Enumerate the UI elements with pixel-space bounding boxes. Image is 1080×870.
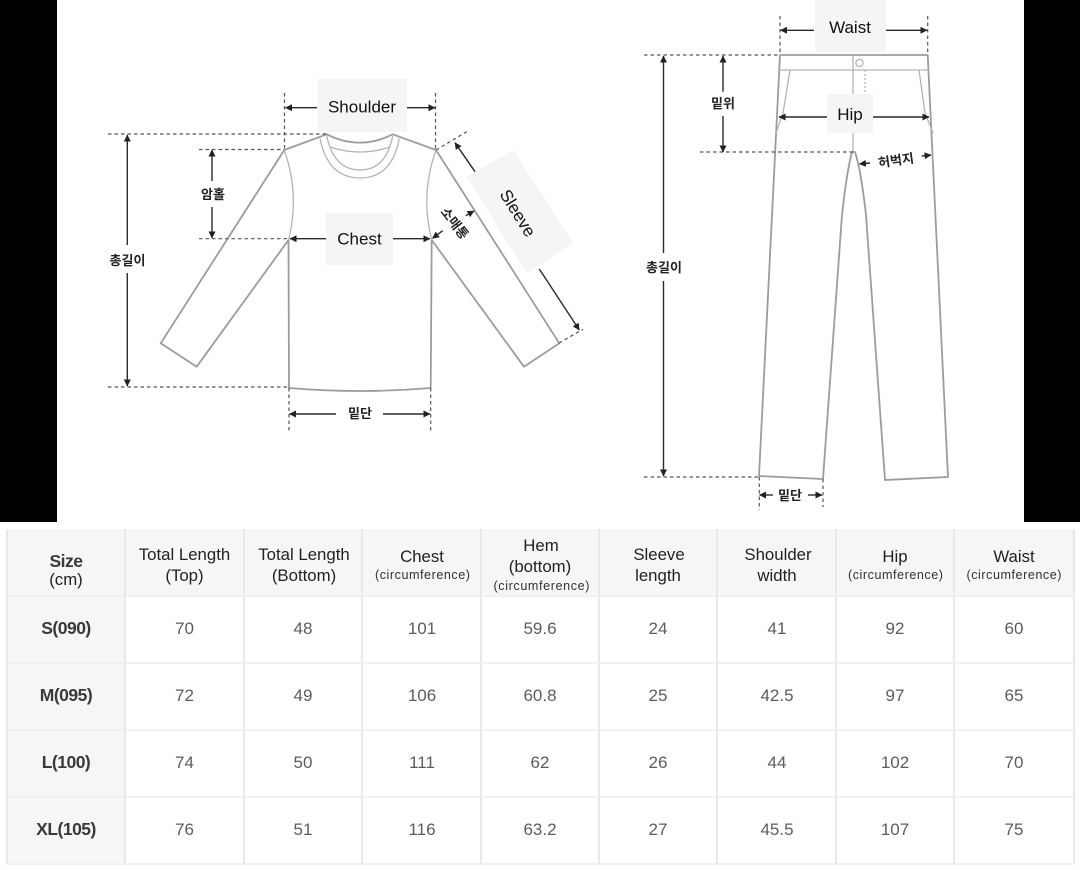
waist arrow right (886, 29, 927, 31)
row: M(095): 97 (886, 686, 904, 705)
row: S(090): 59.6 (523, 619, 557, 638)
header: total length bottom: Total Length (258, 545, 350, 564)
row: L(100): 102 (881, 753, 909, 772)
header: size: Size (49, 551, 83, 571)
row: S(090) (41, 618, 1023, 638)
row: L(100): 44 (768, 753, 786, 772)
sleeve arrow upper (455, 143, 475, 172)
row: XL(105): 76 (175, 820, 194, 839)
shoulder arrow right (407, 107, 435, 109)
header: size: (cm) (49, 570, 83, 589)
measurement guide lines (108, 93, 583, 433)
header: chest: (circumference) (375, 568, 470, 582)
row: XL(105): 75 (1005, 820, 1023, 839)
armhole arrow lower (211, 207, 213, 238)
row: S(090): 24 (649, 619, 667, 638)
size table (7, 529, 1074, 864)
shoulder label: Shoulder (328, 98, 396, 116)
row: M(095): 49 (294, 686, 312, 705)
sleeve label background (467, 150, 573, 273)
row: L(100): 62 (531, 753, 549, 772)
header: total length bottom: (Bottom) (272, 566, 336, 585)
armhole arrow upper (211, 150, 213, 181)
rise arrow lower (722, 116, 724, 152)
chest label: Chest (337, 230, 382, 248)
black margin: left (0, 0, 57, 522)
row: S(090): 48 (294, 619, 312, 638)
black margin: right (1024, 0, 1080, 522)
row: XL(105) (36, 819, 1023, 839)
header: waist: (circumference) (966, 568, 1062, 582)
hem arrow right (808, 494, 822, 496)
rise label: 밑위 (711, 96, 735, 111)
row: S(090): 101 (408, 619, 436, 638)
header: chest: Chest (400, 547, 444, 566)
rise arrow upper (722, 56, 724, 92)
row: L(100): 74 (175, 753, 194, 772)
header: chest (375, 547, 470, 582)
hem label: 밑단 (348, 406, 372, 421)
row: S(090): 41 (768, 619, 786, 638)
thigh label: 허벅지 (877, 151, 915, 170)
chest label background (326, 213, 393, 265)
header: size (49, 551, 83, 589)
row: M(095): 60.8 (523, 686, 557, 705)
long-sleeve shirt outline (161, 134, 559, 391)
hip arrow right (873, 116, 929, 118)
chest arrow left (290, 238, 326, 240)
total length label: 총길이 (110, 253, 145, 268)
waist label background (815, 0, 886, 52)
header: shoulder width: Shoulder (744, 545, 812, 564)
hip label background (827, 94, 873, 133)
hem arrow right (383, 413, 430, 415)
header: total length top: (Top) (165, 566, 204, 585)
sleeve width arrow inner (432, 231, 443, 238)
row: M(095): 72 (175, 686, 194, 705)
row: XL(105): 45.5 (760, 820, 794, 839)
top garment diagram (108, 79, 583, 433)
sleeve arrow lower (539, 269, 579, 330)
row: XL(105): 27 (649, 820, 667, 839)
thigh arrow right (922, 155, 931, 156)
header: waist: Waist (993, 547, 1035, 566)
header: total length bottom (258, 545, 350, 585)
bottom garment diagram (644, 0, 948, 510)
header: hem: (bottom) (509, 557, 571, 576)
armhole label: 암홀 (201, 187, 225, 202)
row: L(100): 111 (409, 753, 435, 772)
row: XL(105): 63.2 (523, 820, 557, 839)
sleeve label: Sleeve (496, 186, 539, 240)
row: XL(105): XL(105) (36, 819, 96, 839)
measurement guide lines (644, 16, 928, 510)
sleeve width label: 소매통 (438, 205, 472, 242)
row: L(100) (42, 752, 1023, 772)
hip arrow left (779, 116, 827, 118)
row: S(090): 92 (886, 619, 904, 638)
row: M(095): 106 (408, 686, 436, 705)
waist label: Waist (829, 18, 871, 37)
header: hem (494, 536, 590, 593)
size column background (7, 596, 125, 864)
row: L(100): L(100) (42, 752, 90, 772)
hip label: Hip (837, 105, 863, 124)
row: M(095): 65 (1005, 686, 1023, 705)
row: L(100): 50 (294, 753, 312, 772)
header: total length top: Total Length (139, 545, 230, 564)
waist arrow left (780, 29, 814, 31)
row: M(095): 42.5 (760, 686, 794, 705)
header: waist (966, 547, 1062, 582)
total length label: 총길이 (646, 260, 682, 275)
row: XL(105): 116 (408, 820, 436, 839)
row: M(095): 25 (649, 686, 667, 705)
table header background (7, 529, 1073, 596)
pants outline (759, 55, 948, 480)
thigh arrow left (860, 163, 870, 164)
row: L(100): 26 (649, 753, 667, 772)
total length arrow lower (662, 281, 664, 476)
shoulder arrow left (286, 107, 317, 109)
row: M(095) (40, 685, 1023, 705)
hem label: 밑단 (778, 488, 802, 503)
total length arrow lower (126, 273, 128, 386)
header: hip: (circumference) (848, 568, 943, 582)
row: S(090): 60 (1005, 619, 1023, 638)
header: sleeve length: Sleeve (633, 545, 685, 564)
row: XL(105): 51 (294, 820, 312, 839)
row: XL(105): 107 (881, 820, 909, 839)
header: sleeve length (633, 545, 685, 585)
header: hem: (circumference) (494, 579, 590, 593)
total length arrow upper (662, 56, 664, 253)
sleeve width arrow outer (466, 211, 474, 216)
header: shoulder width (744, 545, 812, 585)
hem arrow left (760, 494, 773, 496)
header: sleeve length: length (635, 566, 681, 585)
row: S(090): S(090) (41, 618, 91, 638)
header: shoulder width: width (756, 566, 797, 585)
header: hip (848, 547, 943, 582)
header: total length top (139, 545, 230, 585)
header: hip: Hip (882, 547, 908, 566)
table grid (7, 529, 1074, 864)
shoulder label background (318, 79, 407, 132)
chest arrow right (393, 238, 430, 240)
header: hem: Hem (523, 536, 559, 555)
total length arrow (126, 135, 128, 245)
row: L(100): 70 (1005, 753, 1023, 772)
row: M(095): M(095) (40, 685, 92, 705)
hem arrow left (290, 413, 336, 415)
row: S(090): 70 (175, 619, 194, 638)
